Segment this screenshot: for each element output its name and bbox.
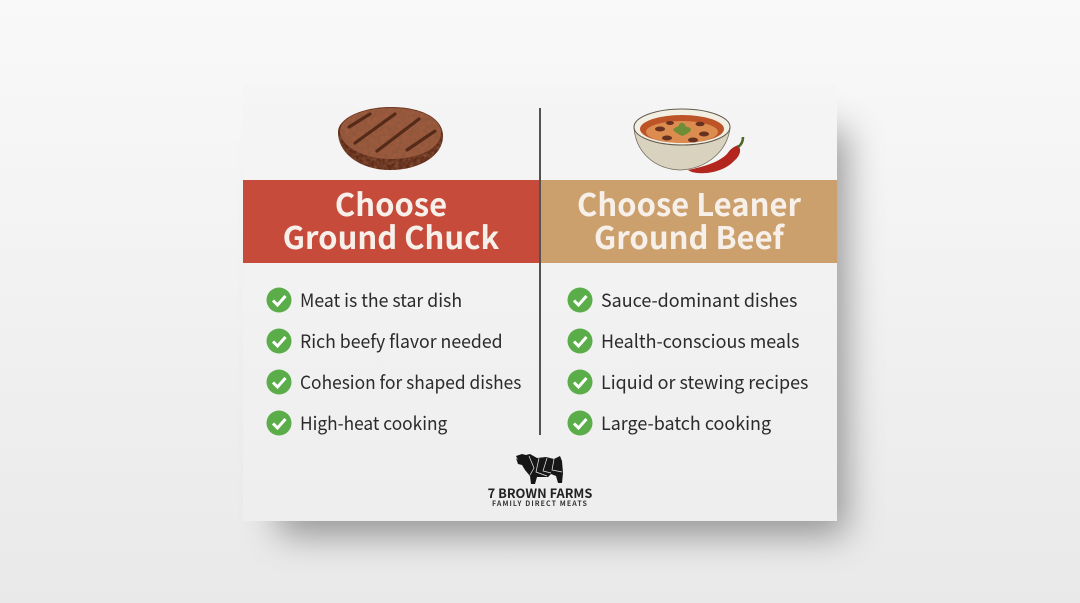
item: meat is the star dish: Meat is the star dish xyxy=(300,287,462,313)
icon: cow xyxy=(516,454,563,484)
tagline: FAMILY DIRECT MEATS xyxy=(492,499,588,509)
list: ground chuck reasons xyxy=(266,287,521,436)
list: leaner ground beef reasons xyxy=(568,287,808,436)
item: high-heat cooking: High-heat cooking xyxy=(300,410,447,436)
header: choose ground chuck: Ground Chuck xyxy=(283,212,499,258)
item: cohesion for shaped dishes: Cohesion for shaped dishes xyxy=(300,369,521,395)
item: sauce-dominant dishes: Sauce-dominant dishes xyxy=(600,287,797,313)
icon: bowl of chili with pepper xyxy=(634,108,744,174)
header: choose leaner ground beef: Ground Beef xyxy=(594,212,784,258)
item: rich beefy flavor needed: Rich beefy flavor needed xyxy=(300,328,503,354)
header: choose leaner ground beef xyxy=(541,180,837,263)
header: choose ground chuck xyxy=(243,180,539,263)
item: large-batch cooking: Large-batch cooking xyxy=(600,410,771,436)
card xyxy=(243,85,837,521)
header: choose leaner ground beef: Choose Leaner xyxy=(577,180,801,225)
logo: 7 brown farms xyxy=(488,454,592,509)
item: liquid or stewing recipes: Liquid or stewing recipes xyxy=(600,369,808,395)
header: choose ground chuck: Choose xyxy=(335,180,447,225)
brand name: 7 BROWN FARMS xyxy=(488,483,592,502)
icon: beef patty xyxy=(338,107,443,170)
item: health-conscious meals: Health-conscious meals xyxy=(600,328,799,354)
card shadow xyxy=(278,130,846,535)
center divider xyxy=(539,108,541,435)
